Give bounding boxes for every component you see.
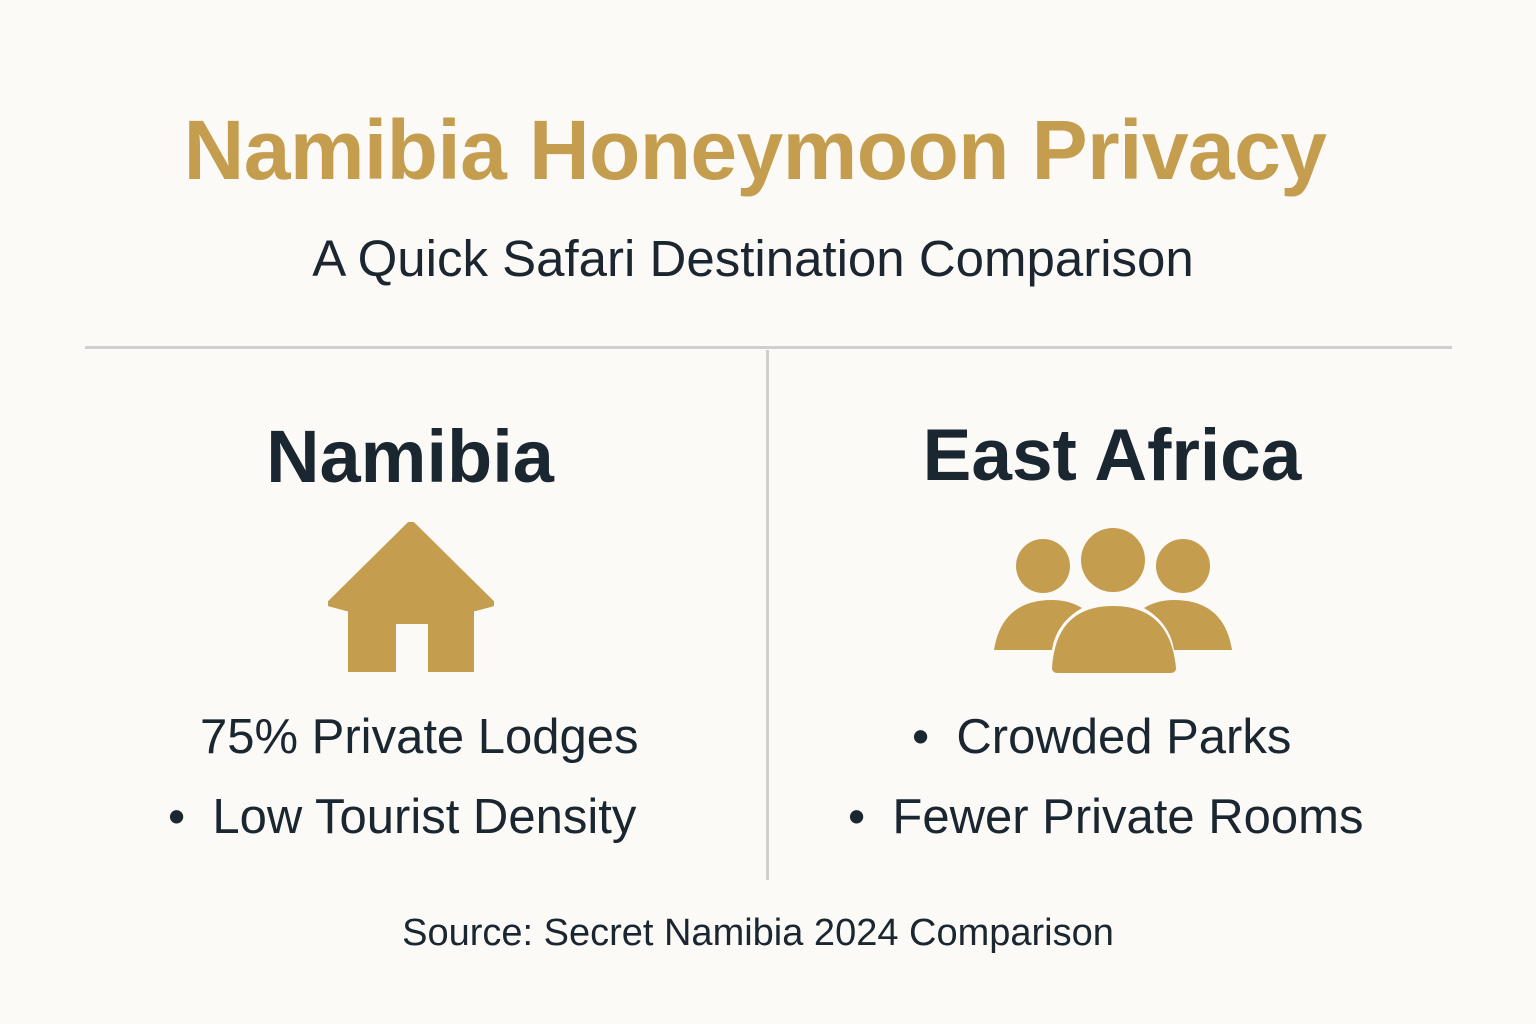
heading: East Africa: East Africa xyxy=(923,415,1301,496)
text: Low Tourist Density: • Low Tourist Density xyxy=(168,790,636,844)
text: Crowded Parks: • Crowded Parks xyxy=(912,710,1291,764)
heading: Namibia: Namibia xyxy=(266,415,554,498)
panel: East Africa xyxy=(848,415,1363,844)
text: Fewer Private Rooms: • Fewer Private Rooms xyxy=(848,790,1363,844)
subtitle: A Quick Safari Destination Comparison xyxy=(312,230,1194,287)
title: Namibia Honeymoon Privacy xyxy=(184,103,1326,197)
text: 75% Private Lodges: 75% Private Lodges xyxy=(200,710,639,764)
icon: house xyxy=(328,522,494,672)
icon: people xyxy=(994,528,1232,673)
panel: Namibia xyxy=(168,415,639,844)
source: Source: Secret Namibia 2024 Comparison xyxy=(402,912,1114,954)
